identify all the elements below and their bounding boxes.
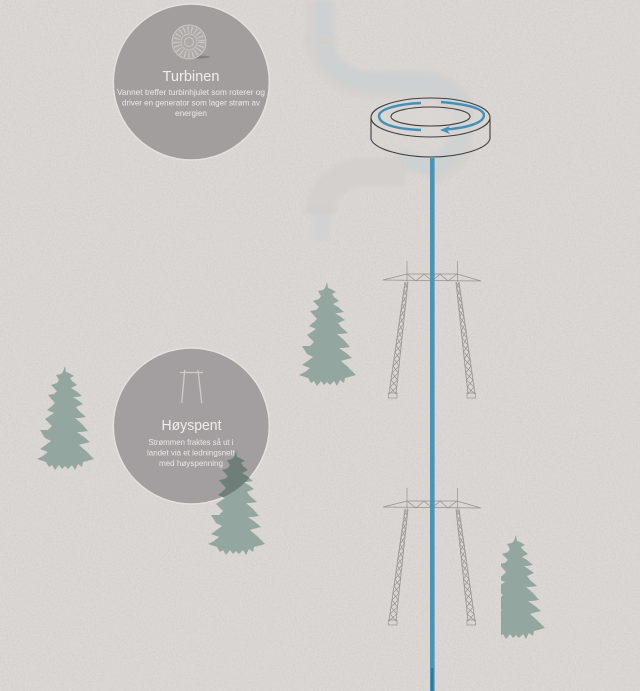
lower pipe	[321, 172, 405, 212]
penstock pipes behind turbine	[305, 0, 465, 241]
description: energien	[175, 108, 207, 118]
arrow head	[440, 126, 450, 134]
circle	[113, 4, 269, 160]
description: Vannet treffer turbinhjulet som roterer og	[117, 87, 265, 97]
tree right cropped	[501, 535, 545, 639]
description	[147, 437, 236, 468]
description: med høyspenning	[159, 458, 223, 468]
heading: Høyspent	[162, 417, 222, 434]
ring inner edge	[391, 107, 470, 126]
icon: pylon	[180, 370, 203, 403]
upper pipe water	[325, 0, 463, 166]
description	[117, 87, 265, 118]
tree left	[37, 366, 94, 470]
ring body	[371, 118, 490, 157]
description: Strømmen fraktes så ut i	[148, 437, 234, 447]
circle	[113, 348, 269, 504]
blue power line	[430, 158, 435, 691]
arrow right	[441, 102, 484, 130]
panel: turbinen	[113, 4, 269, 160]
tree top centre	[299, 282, 356, 386]
transmission tower 2	[383, 488, 481, 625]
description: landet via et ledningsnett	[147, 448, 236, 458]
transmission tower 1	[383, 261, 481, 398]
heading: Turbinen	[162, 68, 220, 85]
tree overlapping høyspent circle	[208, 451, 265, 555]
arrow left	[379, 103, 421, 130]
lower flange	[305, 208, 338, 213]
upper flange	[305, 37, 337, 45]
tree lower part	[208, 451, 265, 555]
tree part inside circle	[218, 452, 250, 498]
turbine ring	[371, 98, 490, 157]
description: driver en generator som lager strøm av	[122, 98, 261, 108]
lower pipe outlet	[312, 208, 330, 241]
upper pipe outer	[320, 0, 465, 170]
ring top	[371, 98, 490, 137]
panel: høyspent	[113, 348, 269, 504]
icon: turbine wheel	[172, 25, 210, 59]
power line lower segment	[431, 668, 434, 691]
